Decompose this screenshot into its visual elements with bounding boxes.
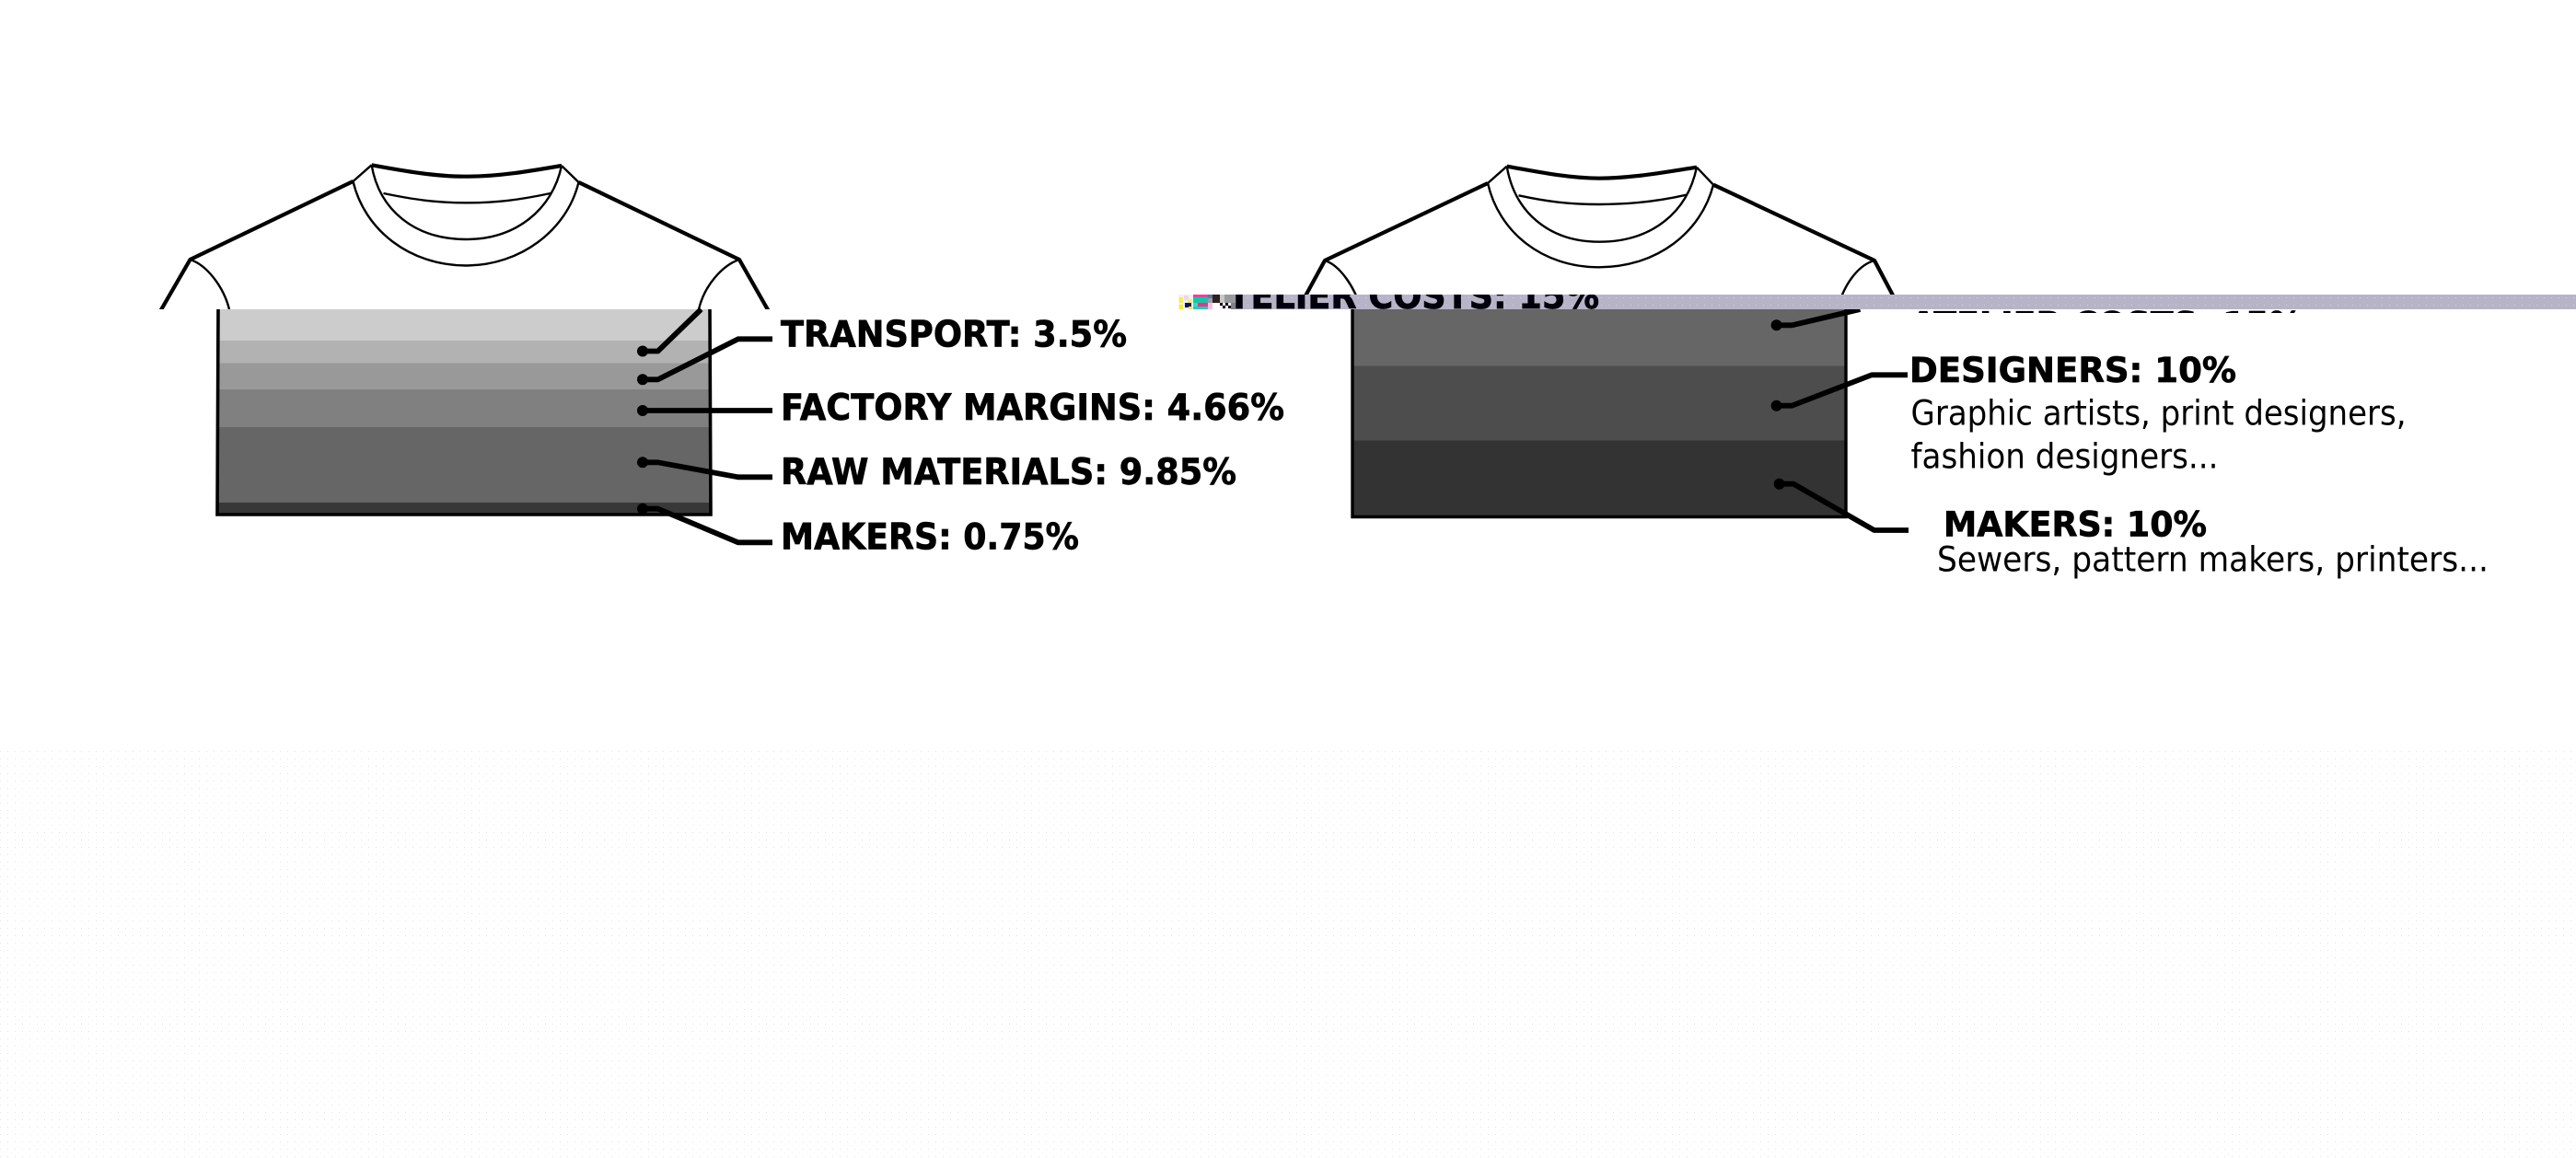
leader: makers <box>1774 479 1909 530</box>
leader: raw materials <box>637 457 772 477</box>
corrupted pixel strip <box>1178 295 1236 309</box>
dotted background texture <box>0 751 2576 1158</box>
stacked cost bar: right <box>1352 309 1846 517</box>
panel: atelier cost shirt <box>1298 167 2489 580</box>
stacked cost bar: left <box>217 309 711 515</box>
panel: factory cost shirt <box>159 165 1284 559</box>
leader: atelier costs <box>1771 309 1860 330</box>
label: designers: DESIGNERS: 10% <box>1909 351 2236 390</box>
t-shirt outline: left <box>159 165 770 313</box>
label: makers: MAKERS: 10% <box>1944 505 2207 545</box>
leader: designers <box>1771 375 1908 411</box>
label: makers: MAKERS: 0.75% <box>781 517 1079 558</box>
leader: factory margins <box>637 405 772 416</box>
clipped label below bar: atelier costs: ATELIER COSTS: 15% <box>1910 306 2303 344</box>
clipped label in bar: atelier costs: ATELIER COSTS: 15% <box>1204 276 1599 318</box>
text: designers detail line 1: Graphic artists, print designers, <box>1911 394 2407 434</box>
label: factory margins: FACTORY MARGINS: 4.66% <box>781 388 1284 429</box>
glitch bar <box>1178 295 2576 309</box>
t-shirt outline: right <box>1304 164 1895 295</box>
text: designers detail line 2: fashion designers... <box>1911 436 2219 476</box>
leader: makers <box>637 504 772 542</box>
label: raw materials: RAW MATERIALS: 9.85% <box>781 452 1236 493</box>
text: makers detail: Sewers, pattern makers, printers... <box>1937 540 2489 580</box>
label: transport: TRANSPORT: 3.5% <box>781 315 1127 355</box>
leader: second line <box>637 339 772 385</box>
leader: transport <box>637 309 702 357</box>
